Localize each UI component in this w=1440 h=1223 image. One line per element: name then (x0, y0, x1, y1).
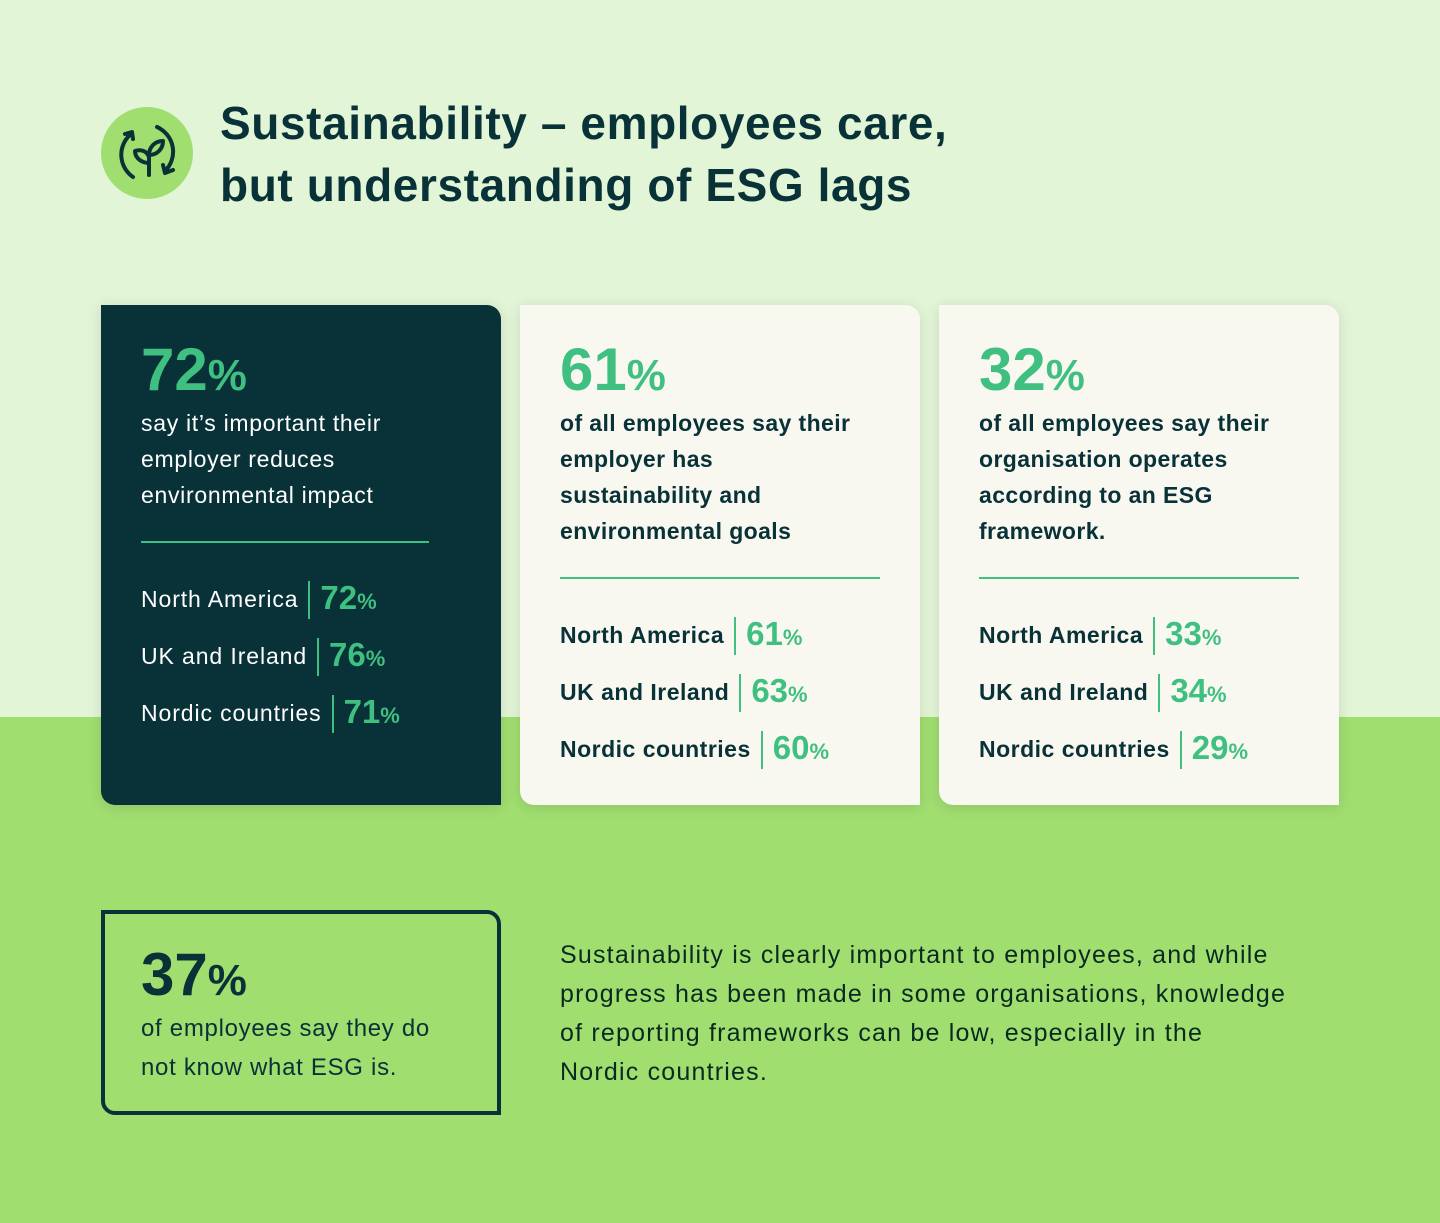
panel: 72%: 72% (320, 578, 377, 616)
panel: 61%: environmental goals (560, 518, 791, 544)
panel: 72%: North America (141, 586, 298, 612)
callout: 37%: not know what ESG is. (141, 1054, 397, 1081)
panel: 32%: 32% (979, 336, 1085, 403)
panel: 32%: 34% (1170, 672, 1227, 708)
panel: 61%: North America (560, 622, 724, 648)
panel: 32%: UK and Ireland (979, 679, 1148, 705)
panel: 72%: 72% (141, 336, 247, 403)
callout: 37%: of employees say they do (141, 1015, 430, 1042)
panel: 61%: 63% (751, 672, 808, 708)
panel: 32%: organisation operates (979, 446, 1228, 472)
panel: 32%: framework. (979, 518, 1106, 544)
panel: 32%: 33% (1165, 614, 1221, 652)
panel: 61%: Nordic countries (560, 736, 751, 762)
panel: 61%: 61% (560, 336, 666, 403)
panel: 72%: 76% (329, 636, 385, 672)
callout: 37% (101, 910, 501, 1115)
panel: 72%: 71% (344, 692, 400, 730)
panel: 61%: 61% (746, 614, 802, 652)
panel: 32%: 29% (1192, 728, 1248, 766)
panel: 72%: employer reduces (141, 446, 335, 472)
text block: summary: Sustainability is clearly important to employees, and while (560, 941, 1269, 969)
icon: recycle leaf (101, 107, 193, 199)
callout: 37%: 37% (141, 941, 247, 1008)
panel: 61%: 60% (773, 728, 829, 766)
panel: 32%: according to an ESG (979, 482, 1213, 508)
title (220, 97, 947, 211)
panel: 32%: North America (979, 622, 1143, 648)
panel: 61%: employer has (560, 446, 713, 472)
title: Sustainability – employees care, (220, 97, 947, 149)
panel: 72%: UK and Ireland (141, 643, 307, 669)
panel: 61%: of all employees say their (560, 410, 850, 436)
text block: summary: of reporting frameworks can be low, especially in the (560, 1019, 1203, 1047)
panel: 61% (520, 305, 920, 805)
panel: 61%: UK and Ireland (560, 679, 729, 705)
panel: 72%: Nordic countries (141, 700, 322, 726)
panel: 72%: say it’s important their (141, 410, 381, 436)
text block: summary: progress has been made in some organisations, knowledge (560, 980, 1286, 1008)
panel: 32% (939, 305, 1339, 805)
panel: 72%: environmental impact (141, 482, 374, 508)
panel: 32%: of all employees say their (979, 410, 1269, 436)
title: but understanding of ESG lags (220, 159, 912, 211)
panel: 72% (101, 305, 501, 805)
panel: 32%: Nordic countries (979, 736, 1170, 762)
text block: summary: Nordic countries. (560, 1058, 768, 1086)
text block: summary (560, 941, 1286, 1086)
panel: 61%: sustainability and (560, 482, 761, 508)
